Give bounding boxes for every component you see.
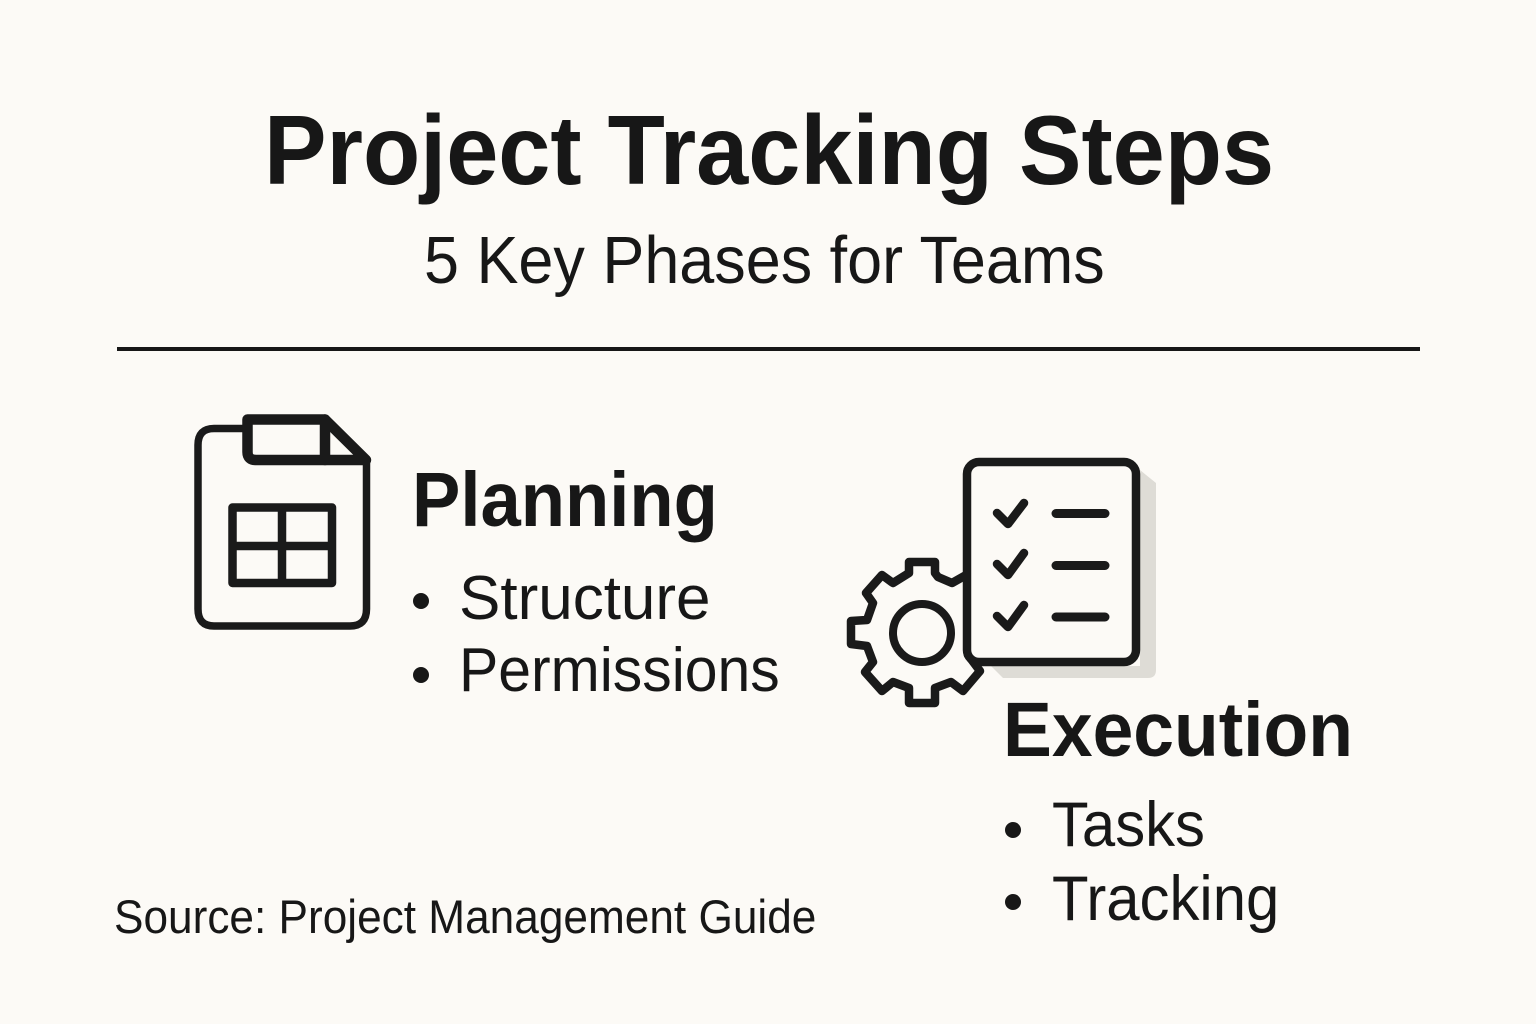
- item: Structure: Structure: [459, 564, 711, 632]
- checklist board: [967, 462, 1136, 662]
- bullet: [1005, 822, 1021, 838]
- title: Project Tracking Steps: [264, 95, 1274, 205]
- check marks and lines: [997, 503, 1105, 627]
- item: Tasks: Tasks: [1052, 790, 1205, 860]
- heading: Planning: Planning: [412, 456, 718, 542]
- icon: gear and checklist: [846, 458, 1156, 708]
- subtitle: 5 Key Phases for Teams: [424, 223, 1105, 298]
- item: Tracking: Tracking: [1052, 864, 1279, 934]
- list: Planning items: [413, 564, 780, 704]
- list: Execution items: [1005, 790, 1279, 934]
- gear: [851, 562, 980, 703]
- heading: Execution: Execution: [1003, 686, 1353, 772]
- bullet: [1005, 894, 1021, 910]
- item: Permissions: Permissions: [459, 636, 780, 704]
- bullet: [413, 667, 429, 683]
- bullet: [413, 593, 429, 609]
- divider: [117, 347, 1420, 351]
- source note: Source: Project Management Guide: [114, 890, 816, 943]
- icon: spreadsheet document: [194, 414, 372, 630]
- card shadow: [991, 470, 1156, 678]
